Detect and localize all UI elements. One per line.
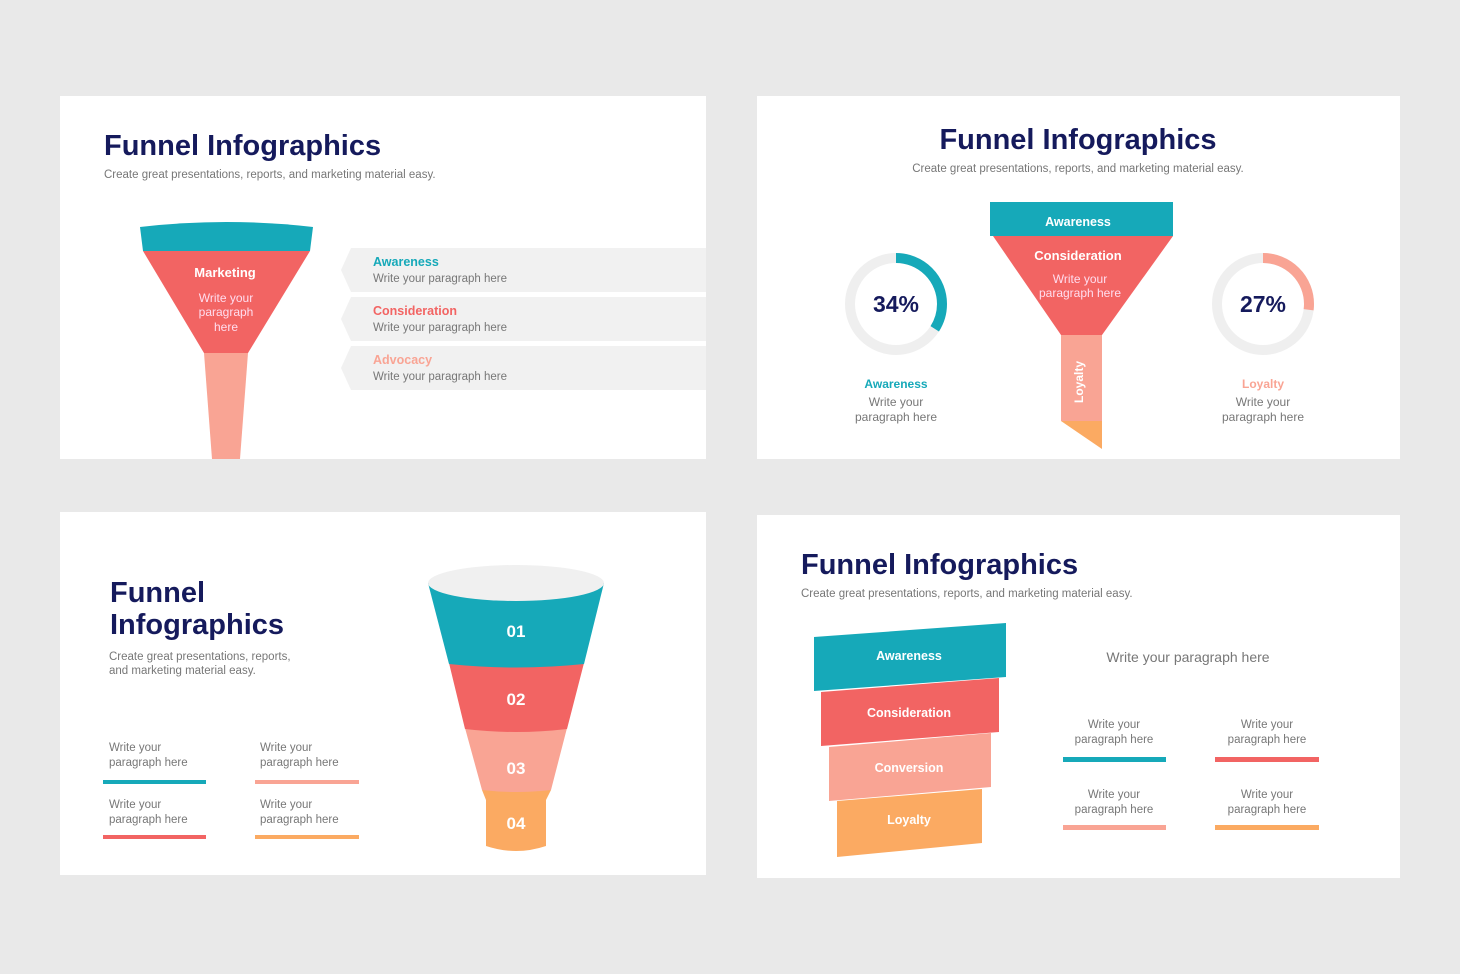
item: consideration: Consideration bbox=[373, 304, 457, 318]
cone funnel bbox=[428, 565, 604, 851]
panel: top-left marketing funnel bbox=[60, 96, 706, 459]
legend items: paragraph here bbox=[109, 757, 188, 769]
subtitle: Create great presentations, reports, and marketing material easy. bbox=[912, 163, 1244, 175]
legend grid: Write your bbox=[1088, 719, 1140, 731]
panel: bottom-left cone funnel: and marketing material easy. bbox=[109, 665, 256, 677]
legend items bbox=[103, 742, 359, 839]
funnel: Write your bbox=[199, 291, 253, 305]
panel: bottom-right slanted funnel bbox=[757, 515, 1400, 878]
funnel: Marketing bbox=[194, 265, 256, 280]
title: Funnel Infographics bbox=[104, 130, 381, 162]
cone funnel: 04 bbox=[507, 814, 526, 833]
item: advocacy: Write your paragraph here bbox=[373, 371, 507, 383]
legend grid: paragraph here bbox=[1075, 734, 1153, 746]
cone funnel: 03 bbox=[507, 759, 525, 778]
legend grid: Write your bbox=[1241, 789, 1293, 801]
subtitle: Create great presentations, reports, and marketing material easy. bbox=[801, 588, 1133, 600]
donut: 34%: Write your bbox=[869, 395, 923, 409]
donut: 27%: Loyalty bbox=[1242, 377, 1284, 391]
item: awareness: Write your paragraph here bbox=[373, 273, 507, 285]
item: consideration: Write your paragraph here bbox=[373, 322, 507, 334]
legend items: Write your bbox=[260, 799, 312, 811]
panel: top-right donut funnel bbox=[757, 96, 1400, 459]
cone funnel: 01 bbox=[507, 622, 525, 641]
donut: 27%: paragraph here bbox=[1222, 410, 1304, 424]
donut: 34%: Awareness bbox=[864, 377, 928, 391]
subtitle: Create great presentations, reports, bbox=[109, 651, 291, 663]
slanted bars bbox=[814, 623, 1006, 857]
legend grid: paragraph here bbox=[1075, 804, 1153, 816]
title: Funnel bbox=[110, 577, 205, 609]
title: Funnel Infographics bbox=[801, 549, 1078, 581]
legend items: Write your bbox=[109, 742, 161, 754]
panel: bottom-left cone funnel: Infographics bbox=[110, 609, 284, 641]
legend items: Write your bbox=[260, 742, 312, 754]
item: awareness: Awareness bbox=[373, 255, 439, 269]
panel: bottom-left cone funnel bbox=[60, 512, 706, 875]
legend grid bbox=[1063, 719, 1319, 830]
donut: 27%: Write your bbox=[1236, 395, 1290, 409]
donut: 34%: 34% bbox=[873, 291, 919, 317]
legend grid: paragraph here bbox=[1228, 734, 1306, 746]
funnel: Write your bbox=[1053, 272, 1107, 286]
legend items: paragraph here bbox=[109, 814, 188, 826]
subtitle: Create great presentations, reports, and marketing material easy. bbox=[104, 169, 436, 181]
slanted bars: Loyalty bbox=[887, 813, 931, 827]
paragraph heading: Write your paragraph here bbox=[1106, 649, 1270, 665]
legend grid: Write your bbox=[1088, 789, 1140, 801]
funnel: Consideration bbox=[1034, 248, 1122, 263]
item: awareness bbox=[341, 248, 706, 292]
funnel: Loyalty bbox=[1072, 361, 1086, 403]
donut: 34%: paragraph here bbox=[855, 410, 937, 424]
donut: 27%: 27% bbox=[1240, 291, 1286, 317]
legend items: Write your bbox=[109, 799, 161, 811]
funnel: here bbox=[214, 320, 238, 334]
funnel bbox=[140, 222, 313, 459]
cone funnel: 02 bbox=[507, 690, 525, 709]
item: consideration bbox=[341, 297, 706, 341]
legend grid: paragraph here bbox=[1228, 804, 1306, 816]
title: Funnel Infographics bbox=[939, 124, 1217, 156]
funnel: paragraph here bbox=[1039, 286, 1121, 300]
legend items: paragraph here bbox=[260, 814, 339, 826]
item: advocacy bbox=[341, 346, 706, 390]
funnel: paragraph bbox=[199, 305, 253, 319]
legend grid: Write your bbox=[1241, 719, 1293, 731]
slanted bars: Awareness bbox=[876, 649, 942, 663]
legend items: paragraph here bbox=[260, 757, 339, 769]
donut: 34% bbox=[850, 258, 942, 424]
funnel bbox=[990, 202, 1173, 449]
donut: 27% bbox=[1217, 258, 1309, 424]
item: advocacy: Advocacy bbox=[373, 353, 432, 367]
slanted bars: Consideration bbox=[867, 706, 951, 720]
funnel: Awareness bbox=[1045, 215, 1111, 229]
slanted bars: Conversion bbox=[875, 761, 943, 775]
